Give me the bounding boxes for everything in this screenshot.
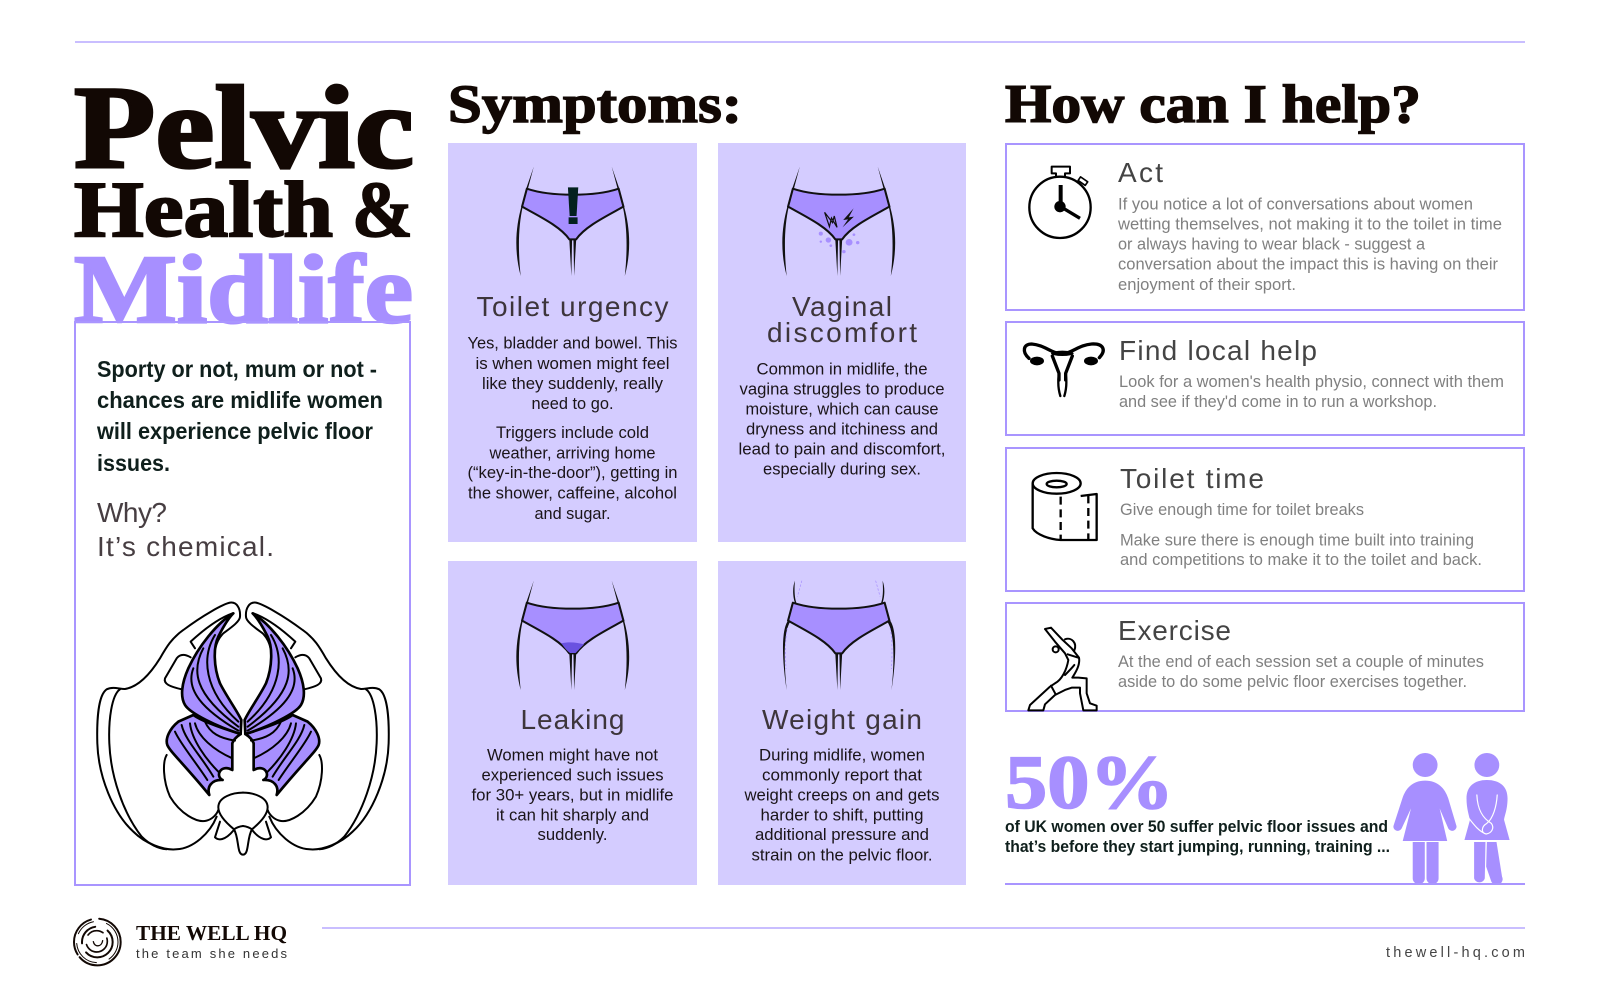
card text — [468, 334, 678, 523]
card title — [767, 291, 917, 348]
card text: experienced such issues — [482, 766, 664, 784]
card text: (“key-in-the-door”), getting in — [468, 464, 678, 482]
card title: Toilet urgency — [476, 291, 668, 322]
icon: underwear with wider hips — [783, 581, 895, 690]
logo tagline: the team she needs — [136, 946, 288, 961]
title: & — [352, 167, 413, 254]
body text — [1120, 501, 1482, 569]
icon: underwear with lightning bolts — [782, 167, 895, 276]
card text: During midlife, women — [759, 746, 925, 764]
icon: lunge pose figure — [1028, 628, 1097, 710]
intro statement: chances are midlife women — [97, 387, 383, 413]
body text: Give enough time for toilet breaks — [1120, 501, 1364, 519]
body text: If you notice a lot of conversations about women — [1118, 196, 1473, 214]
body text: or always having to wear black - suggest a — [1118, 236, 1426, 254]
panel: intro — [75, 322, 410, 885]
icon: toilet roll — [1033, 473, 1097, 540]
body text: wetting themselves, not making it to the toilet in time — [1117, 216, 1502, 234]
card text: and sugar. — [534, 505, 610, 523]
body text: Look for a women's health physio, connect with them — [1119, 373, 1504, 391]
card text: suddenly. — [538, 826, 608, 844]
statistic caption: of UK women over 50 suffer pelvic floor issues and — [1005, 817, 1388, 836]
statistic caption — [1005, 817, 1390, 856]
body text: At the end of each session set a couple of minutes — [1118, 653, 1484, 671]
card text: commonly report that — [762, 766, 922, 784]
title: Health — [74, 167, 333, 254]
body text: enjoyment of their sport. — [1118, 276, 1296, 294]
card text: lead to pain and discomfort, — [738, 440, 946, 458]
card title: Vaginal — [792, 291, 892, 322]
card text — [743, 746, 940, 864]
icon: uterus — [1024, 344, 1103, 396]
card text: vagina struggles to produce — [740, 380, 944, 398]
card text: moisture, which can cause — [746, 400, 938, 418]
panel: find local help — [1006, 322, 1524, 435]
card text: is when women might feel — [476, 355, 670, 373]
title: Midlife — [74, 236, 413, 343]
body text: aside to do some pelvic floor exercises together. — [1118, 673, 1467, 691]
panel: exercise — [1006, 603, 1524, 711]
icon: underwear with exclamation mark — [516, 167, 629, 276]
card text: weather, arriving home — [489, 444, 656, 462]
logo name: THE WELL HQ — [136, 921, 287, 945]
card text: weight creeps on and gets — [743, 786, 940, 804]
card title: discomfort — [767, 317, 917, 348]
card text: harder to shift, putting — [760, 806, 924, 824]
intro statement: Sporty or not, mum or not - — [97, 356, 377, 382]
intro statement: issues. — [97, 450, 170, 476]
card text: dryness and itchiness and — [746, 420, 938, 438]
card text: the shower, caffeine, alcohol — [468, 484, 677, 502]
card text: additional pressure and — [755, 826, 929, 844]
panel: act — [1006, 144, 1524, 310]
body text: and see if they'd come in to run a workshop. — [1119, 393, 1437, 411]
logo mark: spiral — [74, 919, 121, 965]
panel: toilet time — [1006, 448, 1524, 591]
card text: Yes, bladder and bowel. This — [468, 334, 678, 352]
card text: it can hit sharply and — [496, 806, 649, 824]
icon: stopwatch — [1029, 167, 1091, 238]
why text: Why? — [97, 497, 167, 528]
footer divider line — [322, 927, 1525, 929]
title: Exercise — [1118, 615, 1231, 646]
top divider line — [75, 41, 1525, 43]
body text — [1119, 373, 1504, 411]
icon: pelvic floor anatomy — [97, 603, 389, 855]
card text — [472, 746, 674, 844]
title: Find local help — [1119, 335, 1317, 366]
logo — [74, 919, 288, 965]
bottom right divider line — [1005, 883, 1525, 885]
card text: like they suddenly, really — [482, 375, 664, 393]
card text: need to go. — [532, 395, 614, 413]
title — [74, 62, 414, 343]
heading: how can I help: How can I help? — [1005, 74, 1421, 134]
body text — [1118, 653, 1484, 691]
statistic: 50%: 50% — [1005, 741, 1174, 825]
card text: strain on the pelvic floor. — [752, 846, 932, 864]
body text: and competitions to make it to the toilet and back. — [1120, 551, 1482, 569]
card title: Leaking — [520, 704, 624, 735]
body text — [1117, 196, 1502, 294]
card text: Women might have not — [487, 746, 658, 764]
why text: It’s chemical. — [97, 531, 274, 562]
panel: vaginal discomfort — [718, 143, 966, 542]
card text — [738, 360, 946, 478]
statistic caption: that’s before they start jumping, running, training ... — [1005, 837, 1390, 856]
title: Pelvic — [74, 62, 414, 193]
heading: symptoms: Symptoms: — [448, 74, 742, 134]
icon: two women figures — [1393, 753, 1510, 885]
title: Act — [1118, 157, 1163, 188]
intro statement — [96, 356, 383, 476]
website address: thewell-hq.com — [1386, 945, 1525, 961]
why text — [97, 497, 274, 562]
icon: underwear with leak — [516, 581, 629, 690]
body text: conversation about the impact this is having on their — [1118, 256, 1499, 274]
intro statement: will experience pelvic floor — [96, 418, 373, 444]
panel: weight gain — [718, 561, 966, 885]
panel: toilet urgency — [448, 143, 697, 542]
card text: Common in midlife, the — [756, 360, 928, 378]
card text: Triggers include cold — [496, 424, 649, 442]
body text: Make sure there is enough time built into training — [1120, 532, 1474, 550]
title: Toilet time — [1120, 463, 1264, 494]
card title: Weight gain — [762, 704, 922, 735]
card text: especially during sex. — [763, 460, 921, 478]
panel: leaking — [448, 561, 697, 885]
card text: for 30+ years, but in midlife — [472, 786, 674, 804]
